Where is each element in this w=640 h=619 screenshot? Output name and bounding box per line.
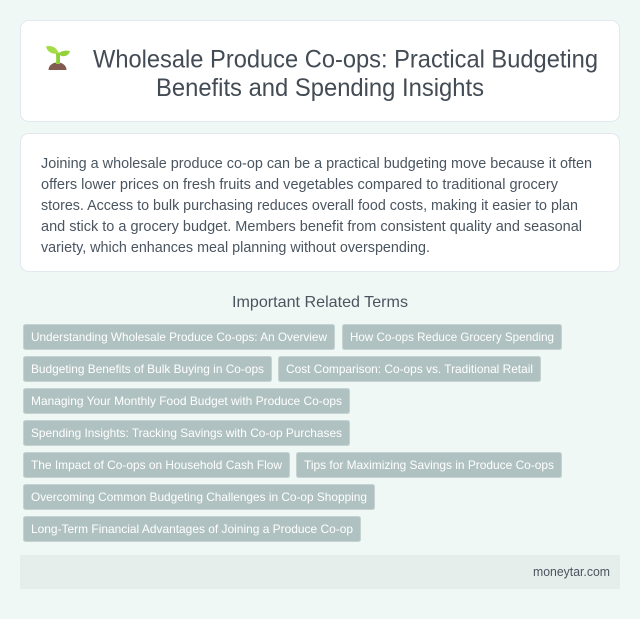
panel: related term tags bbox=[24, 324, 562, 542]
tag bbox=[24, 388, 350, 414]
intro paragraph bbox=[41, 156, 592, 256]
tag: How Co-ops Reduce Grocery Spending bbox=[350, 330, 554, 344]
tag: Tips for Maximizing Savings in Produce Co-ops bbox=[304, 458, 554, 472]
footer bbox=[20, 555, 620, 589]
tag bbox=[24, 420, 350, 446]
footer: moneytar.com bbox=[533, 564, 610, 579]
tag: Managing Your Monthly Food Budget with Produce Co-ops bbox=[31, 394, 342, 408]
intro paragraph: offers lower prices on fresh fruits and vegetables compared to traditional grocery bbox=[41, 177, 559, 193]
title: Wholesale Produce Co-ops: Practical Budgeting bbox=[93, 46, 598, 74]
tag bbox=[342, 324, 562, 350]
tag: Long-Term Financial Advantages of Joining a Produce Co-op bbox=[31, 522, 353, 536]
panel: intro text card bbox=[20, 134, 620, 272]
intro paragraph: and stick to a grocery budget. Members benefit from consistent quality and seasonal bbox=[41, 219, 582, 235]
tag: Overcoming Common Budgeting Challenges in Co-op Shopping bbox=[31, 490, 367, 504]
intro paragraph: variety, which enhances meal planning without overspending. bbox=[41, 240, 430, 256]
title: Benefits and Spending Insights bbox=[156, 74, 484, 102]
tag: Understanding Wholesale Produce Co-ops: An Overview bbox=[31, 330, 327, 344]
tag: Cost Comparison: Co-ops vs. Traditional Retail bbox=[286, 362, 533, 376]
heading: important related terms: Important Related Terms bbox=[232, 294, 408, 311]
panel: title card bbox=[20, 20, 620, 122]
title bbox=[93, 46, 598, 102]
tag bbox=[24, 516, 360, 542]
tag bbox=[24, 484, 374, 510]
tag bbox=[24, 452, 290, 478]
tag: The Impact of Co-ops on Household Cash Flow bbox=[31, 458, 282, 472]
tag bbox=[278, 356, 540, 382]
tag bbox=[24, 356, 272, 382]
intro paragraph: Joining a wholesale produce co-op can be a practical budgeting move because it often bbox=[41, 156, 592, 172]
tag: Spending Insights: Tracking Savings with Co-op Purchases bbox=[31, 426, 342, 440]
tag bbox=[296, 452, 562, 478]
icon: seedling bbox=[46, 46, 70, 70]
intro paragraph: stores. Access to bulk purchasing reduces overall food costs, making it easier to plan bbox=[41, 198, 578, 214]
tag bbox=[24, 324, 334, 350]
tag: Budgeting Benefits of Bulk Buying in Co-ops bbox=[31, 362, 264, 376]
